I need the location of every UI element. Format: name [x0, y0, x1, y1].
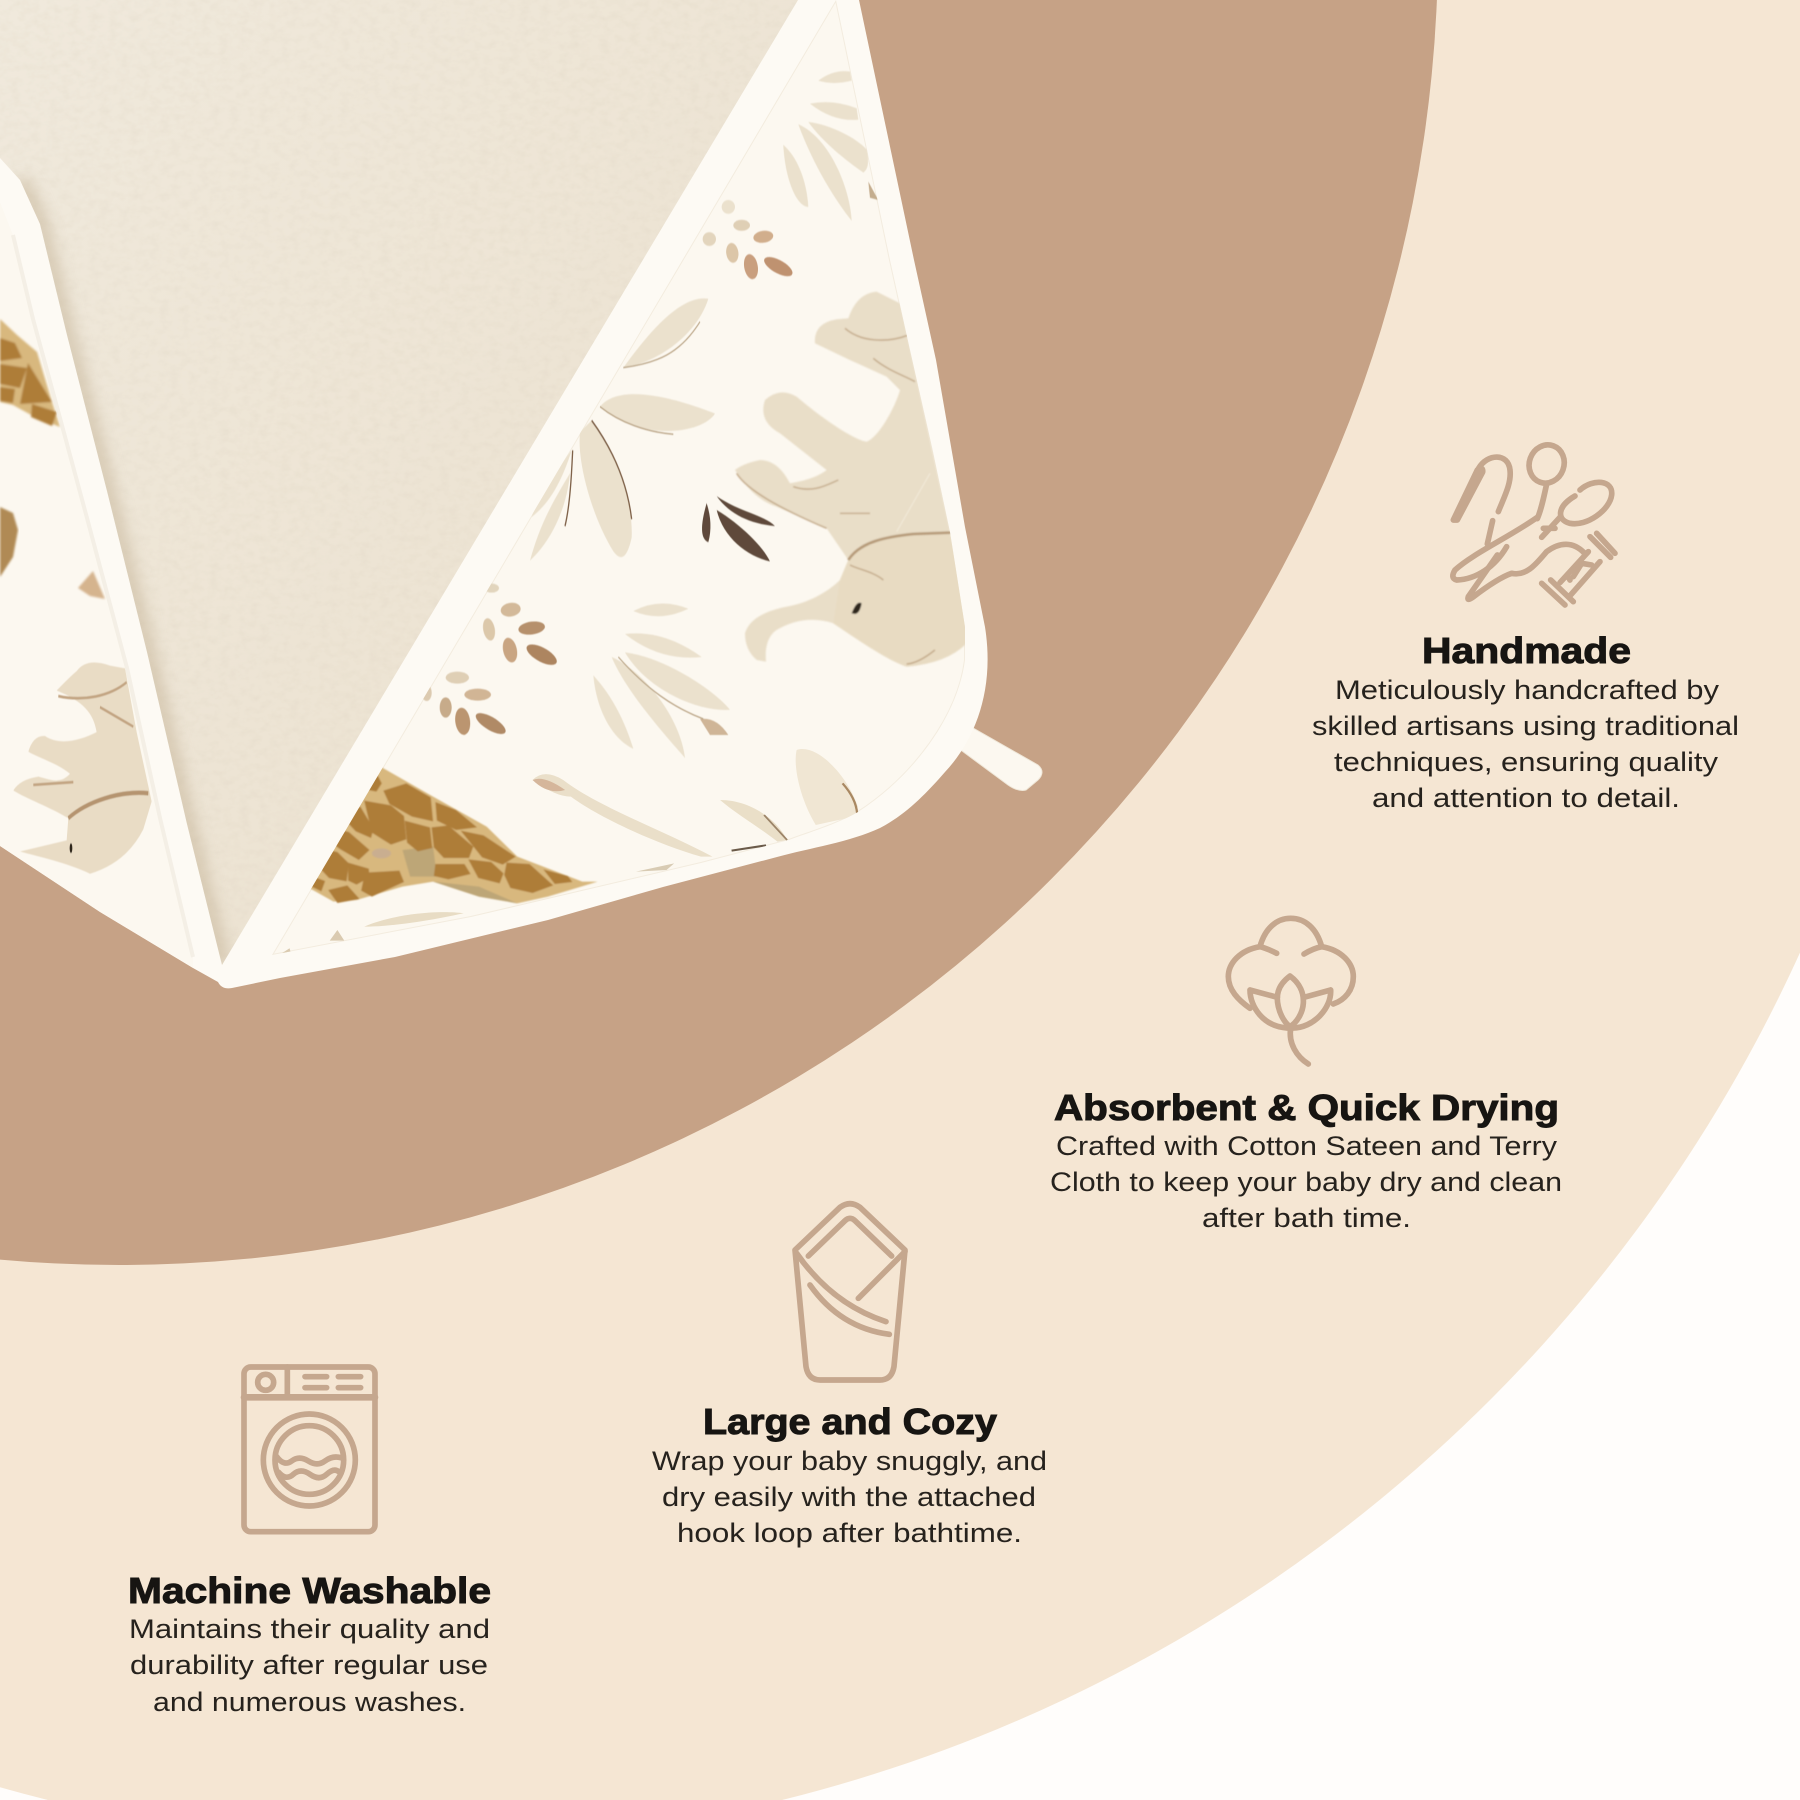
text block: Crafted with Cotton Sateen and Terry [1056, 1131, 1558, 1161]
lion left [0, 507, 18, 577]
palm leaves lower [593, 604, 730, 758]
piping shading [13, 235, 193, 957]
giraffe left [0, 319, 60, 427]
leaves and sprigs [422, 71, 878, 758]
feature: absorbent [1050, 918, 1562, 1233]
animal lower right [282, 749, 858, 955]
text block: and attention to detail. [1372, 783, 1680, 813]
text block: dry easily with the attached [662, 1482, 1036, 1512]
feature: machine washable [128, 1367, 491, 1717]
left printed panel [0, 318, 193, 968]
icon: swaddled blanket [795, 1204, 905, 1380]
hook loop [958, 724, 1042, 790]
palm leaves top [783, 71, 878, 221]
text block: Wrap your baby snuggly, and [652, 1446, 1047, 1476]
large elephant [735, 292, 967, 667]
text block: Meticulously handcrafted by [1335, 675, 1720, 705]
text block: Maintains their quality and [129, 1614, 490, 1644]
icon: washing machine [244, 1367, 375, 1532]
text block: techniques, ensuring quality [1334, 747, 1719, 777]
dark leaves [702, 496, 775, 561]
sprig lower [422, 672, 507, 738]
heading: Absorbent & Quick Drying [1054, 1087, 1559, 1128]
heading: Handmade [1422, 630, 1631, 671]
elephant left [13, 662, 152, 874]
small patch [78, 571, 105, 599]
giraffe and lower print [282, 749, 858, 955]
text block: durability after regular use [130, 1650, 488, 1680]
text block [1312, 675, 1739, 813]
brown circle [0, 0, 1438, 1265]
terry edge shading [20, 180, 222, 965]
feature: handmade [1312, 440, 1739, 813]
towel piping outline [0, 0, 988, 988]
sprig middle [481, 583, 559, 669]
text block: and numerous washes. [153, 1687, 466, 1717]
text block: Cloth to keep your baby dry and clean [1050, 1167, 1562, 1197]
icon: scissors needle and thread [1453, 440, 1615, 605]
giraffe hide [307, 765, 598, 903]
palm leaves middle [530, 298, 715, 561]
feature: large and cozy [652, 1204, 1047, 1548]
heading: Large and Cozy [703, 1401, 997, 1442]
text block: after bath time. [1202, 1203, 1411, 1233]
hooded towel photo [0, 0, 1042, 988]
text block [1050, 1131, 1562, 1233]
text block: hook loop after bathtime. [677, 1518, 1022, 1548]
icon: cotton flower [1228, 918, 1353, 1064]
text block: skilled artisans using traditional [1312, 711, 1739, 741]
right printed panel [272, 0, 967, 955]
text block [129, 1614, 490, 1717]
heading: Machine Washable [128, 1570, 491, 1611]
text block [652, 1446, 1047, 1548]
sprig top [703, 200, 794, 282]
terry cloth hood [0, 0, 798, 965]
